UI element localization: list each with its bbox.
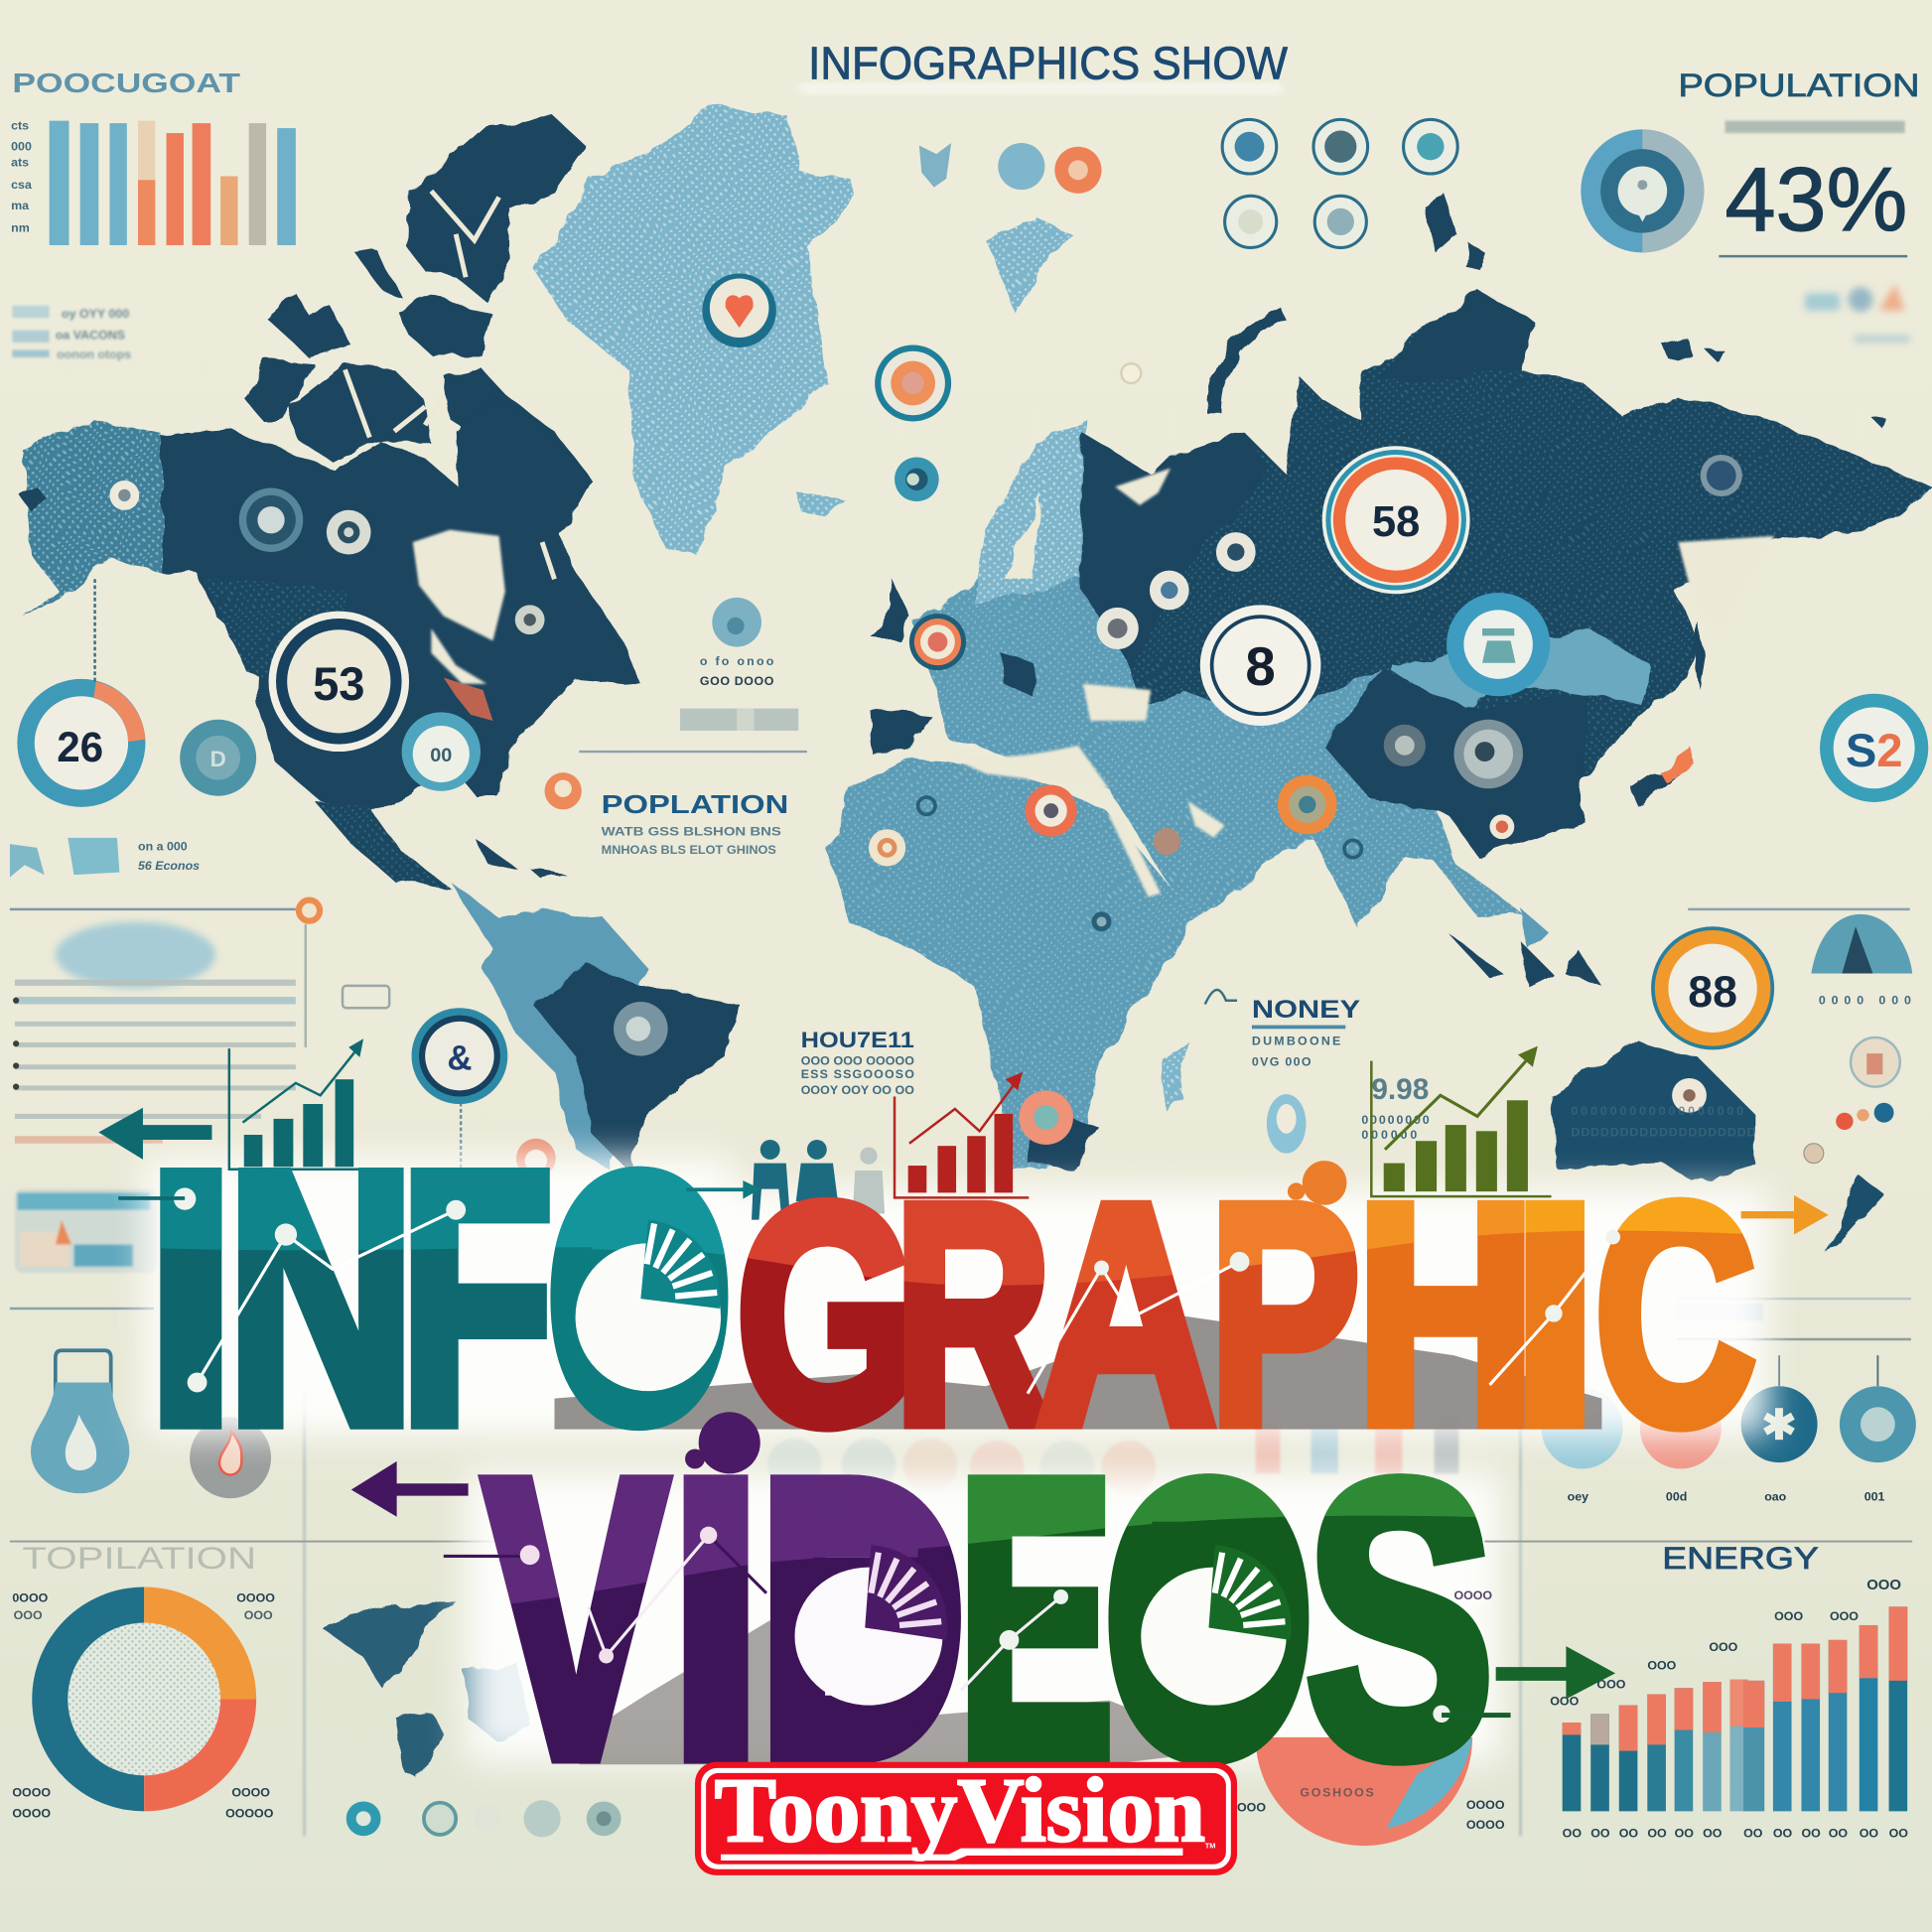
legend rows: left: oa VACONS bbox=[56, 328, 125, 342]
panel: bottom left donut bbox=[10, 1541, 505, 1821]
bar chart: top left: ma bbox=[11, 199, 29, 212]
marker: indian ocean orange stat: 88 bbox=[1688, 968, 1737, 1017]
lighter upper tone: A bbox=[1036, 1140, 1216, 1489]
asia and europe bbox=[914, 573, 1520, 930]
panel: energy chart: OOO bbox=[1647, 1659, 1677, 1673]
base dark letters: C bbox=[1594, 1139, 1756, 1488]
population label: center left: MNHOAS BLS ELOT GHINOS bbox=[602, 843, 776, 857]
marker: alaska bbox=[109, 481, 139, 510]
panel: bottom left donut: TOPILATION bbox=[22, 1541, 256, 1576]
base dark letters bbox=[484, 1398, 1493, 1840]
marker: canada central bbox=[327, 510, 371, 554]
panel: right icons row: oey bbox=[1568, 1490, 1588, 1504]
icon: salmon circle bbox=[1640, 1387, 1722, 1468]
lighter upper tone: V bbox=[484, 1400, 668, 1839]
marker: mediterranean bbox=[1026, 785, 1077, 837]
small world map bbox=[321, 1601, 530, 1780]
panel: energy chart: OO bbox=[1703, 1826, 1723, 1840]
panel: energy chart: OO bbox=[1801, 1826, 1821, 1840]
lighter upper tone: S bbox=[1307, 1403, 1493, 1837]
north america bbox=[162, 394, 640, 813]
population label: center left: GOO DOOO bbox=[700, 674, 774, 688]
arctic islands east bbox=[1422, 191, 1889, 431]
marker: atlantic south partly hidden bbox=[516, 1139, 556, 1177]
money label: NONEY bbox=[1252, 997, 1361, 1024]
icon: blue dial bbox=[998, 143, 1044, 190]
donut chart bbox=[32, 1587, 256, 1811]
panel: bottom left donut: 0OOO bbox=[12, 1590, 49, 1604]
logo: ToonyVision: ToonyVision bbox=[715, 1759, 1205, 1861]
panel: right upper labels: 0000 000 bbox=[1819, 993, 1911, 1007]
base dark letters: O bbox=[546, 1103, 733, 1495]
marker: atlantic bbox=[875, 345, 951, 421]
people icons bbox=[752, 1140, 885, 1220]
canada channels bbox=[345, 191, 554, 579]
money label: DUMBOONE bbox=[1252, 1034, 1340, 1047]
chart: olive growth: 000000 bbox=[1361, 1128, 1417, 1142]
chart: teal growth above I bbox=[229, 1038, 376, 1170]
marker: teal pacific: D bbox=[210, 747, 226, 771]
base dark letters: P bbox=[1209, 1140, 1360, 1489]
panel: right icons row bbox=[1542, 1299, 1916, 1504]
lighter upper tone: C bbox=[1594, 1139, 1756, 1488]
lighter upper tone bbox=[160, 1166, 1743, 1285]
lighter upper tone: I bbox=[1512, 1139, 1598, 1489]
world map bbox=[17, 104, 1932, 1256]
hout label bbox=[801, 1028, 914, 1097]
bar chart: top left: nm bbox=[11, 220, 30, 234]
base dark letters: F bbox=[400, 1098, 553, 1497]
marker: large usa stat bbox=[269, 612, 409, 752]
base dark letters: I bbox=[669, 1398, 763, 1839]
panel: faded striped panel left bbox=[10, 897, 389, 1144]
base dark letters: V bbox=[484, 1400, 668, 1839]
icon: orange dial bbox=[1054, 147, 1102, 194]
dots on I bbox=[685, 1412, 760, 1473]
arrow: purple left bbox=[351, 1461, 469, 1517]
japan bbox=[1632, 622, 1707, 807]
alaska bbox=[22, 419, 162, 619]
marker: teal pacific bbox=[180, 720, 256, 796]
panel: energy chart: OOO bbox=[1709, 1640, 1738, 1654]
legend rows: left: oy OYY 000 bbox=[62, 307, 129, 321]
lighter upper tone: O bbox=[1103, 1404, 1314, 1837]
white haze behind headline bbox=[145, 1159, 1768, 1762]
panel: energy chart: OO bbox=[1619, 1826, 1638, 1840]
small text: far left lower bbox=[10, 838, 200, 878]
panel: right icons row: 00d bbox=[1666, 1490, 1687, 1504]
icons: top center bbox=[919, 119, 1457, 383]
lighter upper tone: N bbox=[226, 1098, 415, 1497]
marker: atlantic pale bbox=[712, 598, 761, 647]
panel: bottom left donut: OOO bbox=[14, 1608, 43, 1622]
population label: center left: o fo onoo bbox=[700, 654, 774, 668]
panel: faded widget left bbox=[15, 1189, 157, 1273]
icon: flame bbox=[190, 1417, 271, 1498]
panel: bottom left donut: OOO bbox=[244, 1608, 273, 1622]
lighter upper tone: P bbox=[1209, 1140, 1360, 1489]
panel: population 43% bbox=[1581, 68, 1920, 343]
panel: bottom left donut: OOOO bbox=[231, 1785, 270, 1799]
title: INFOGRAPHICS SHOW bbox=[808, 37, 1289, 88]
faded section behind title bbox=[305, 1368, 1520, 1836]
canada arctic islands bbox=[246, 117, 592, 530]
panel: right icons row: ✱ bbox=[1761, 1402, 1797, 1449]
bar chart: top left: ats bbox=[11, 156, 29, 170]
marker: russia small bbox=[1097, 532, 1256, 649]
panel: energy chart: OO bbox=[1743, 1826, 1763, 1840]
inland seas bbox=[413, 469, 1774, 897]
population label: center left bbox=[579, 654, 807, 857]
donut behind videos: OOO bbox=[1237, 1800, 1266, 1814]
bar chart: top left bbox=[11, 68, 296, 245]
pie in D bbox=[794, 1522, 947, 1716]
chart: red growth bbox=[895, 1072, 1029, 1197]
marker: stat 8 bbox=[1200, 605, 1320, 726]
panel: energy chart: OO bbox=[1675, 1826, 1694, 1840]
panel: bottom left donut: OOOO bbox=[236, 1590, 275, 1604]
marker: south china bbox=[1489, 814, 1514, 839]
marker: russia east bbox=[1701, 455, 1742, 496]
greenland bbox=[536, 104, 857, 554]
hout label: ESS SSGOOOSO bbox=[801, 1067, 914, 1081]
lighter upper tone: H bbox=[1356, 1140, 1536, 1489]
marker: great lakes flag bbox=[444, 678, 492, 721]
panel: energy chart: OO bbox=[1647, 1826, 1667, 1840]
grey swoosh behind letters bbox=[554, 1315, 1601, 1764]
iceland bbox=[797, 492, 844, 517]
icon: small pin bbox=[919, 143, 951, 188]
marker: large russia stat bbox=[1322, 446, 1470, 594]
marker: orange bbox=[545, 772, 582, 809]
small text: far left lower: on a 000 bbox=[138, 839, 188, 853]
base dark letters: R bbox=[895, 1141, 1051, 1489]
map markers: eurasia: DDDDDDDDDDDDDDDDDDD bbox=[1571, 1125, 1756, 1139]
lighter upper tone: E bbox=[957, 1399, 1114, 1840]
marker: indian ocean orange stat bbox=[1651, 926, 1774, 1049]
panel: energy chart: OOO bbox=[1830, 1609, 1859, 1623]
marker: quebec bbox=[515, 605, 545, 634]
lighter upper tone: O bbox=[546, 1103, 733, 1495]
small icons row: bottom bbox=[346, 1800, 621, 1837]
headline: INFOGRAPHIC bbox=[118, 1097, 1756, 1497]
australia bbox=[1552, 1039, 1754, 1181]
legend rows: left: oonon otops bbox=[57, 347, 131, 361]
marker: large russia stat: 58 bbox=[1372, 498, 1420, 546]
panel: energy chart: OOO bbox=[1774, 1609, 1803, 1623]
arrow: orange right bbox=[1741, 1195, 1829, 1235]
donut behind videos: OOOO bbox=[1453, 1588, 1492, 1602]
novaya zemlya bbox=[1213, 314, 1284, 413]
donut behind videos: OOOO bbox=[1466, 1798, 1505, 1812]
panel: energy chart: OOO bbox=[1596, 1677, 1626, 1691]
panel: population 43%: POPULATION bbox=[1678, 68, 1920, 103]
marker: south africa bbox=[1019, 1090, 1073, 1145]
central and south america bbox=[450, 881, 647, 1171]
icons: faded bbox=[1805, 283, 1910, 343]
arrow: green right bbox=[1496, 1646, 1615, 1699]
panel: energy chart: OOO bbox=[1550, 1695, 1580, 1709]
panel: bottom left donut: OOOO bbox=[12, 1807, 51, 1821]
marker: brazil bbox=[614, 1002, 668, 1056]
base dark letters: A bbox=[1036, 1140, 1216, 1489]
base dark letters bbox=[146, 1097, 1756, 1497]
panel: bottom left donut: OOOO bbox=[12, 1785, 51, 1799]
arrow: teal left bbox=[98, 1108, 211, 1160]
base dark letters: H bbox=[1356, 1140, 1536, 1489]
icon: teal circle bbox=[1840, 1386, 1916, 1462]
russia bbox=[1083, 290, 1932, 857]
hout label: HOU7E11 bbox=[801, 1028, 914, 1052]
donut: population bbox=[1581, 129, 1704, 252]
marker: stat 8: 8 bbox=[1245, 636, 1276, 697]
panel: right icons row: 001 bbox=[1864, 1490, 1885, 1504]
base dark letters: S bbox=[1307, 1403, 1493, 1837]
icon: bottle bbox=[31, 1350, 129, 1493]
panel: energy chart: OO bbox=[1889, 1826, 1908, 1840]
panel: energy chart: OO bbox=[1829, 1826, 1848, 1840]
donut behind videos bbox=[1237, 1588, 1505, 1846]
chart: olive growth: 9.98 bbox=[1371, 1073, 1429, 1106]
bar chart: top left: POOCUGOAT bbox=[12, 68, 240, 98]
marker: large usa stat: 53 bbox=[313, 657, 365, 710]
base dark letters: E bbox=[957, 1399, 1114, 1840]
panel: energy chart: ENERGY bbox=[1662, 1541, 1819, 1576]
lighter upper tone: F bbox=[400, 1098, 553, 1497]
money label bbox=[1205, 990, 1361, 1069]
uk and iberia bbox=[873, 577, 909, 640]
chart: olive growth: 00000000 bbox=[1361, 1113, 1430, 1127]
chart: olive growth bbox=[1361, 1046, 1552, 1196]
marker: australia bbox=[1672, 1078, 1707, 1113]
pie in O bbox=[1141, 1522, 1292, 1716]
svalbard patch bbox=[986, 215, 1072, 314]
marker: small atlantic bbox=[895, 457, 939, 501]
lighter upper tone: R bbox=[895, 1141, 1051, 1489]
marker: canada west bbox=[239, 487, 303, 552]
bar chart: top left: csa bbox=[11, 178, 32, 192]
donut behind videos: OOOO bbox=[1466, 1818, 1505, 1832]
lighter upper tone: D bbox=[758, 1398, 967, 1839]
base dark letters: I bbox=[1512, 1139, 1598, 1489]
lighter upper tone: I bbox=[146, 1097, 236, 1497]
marker: greenland bbox=[702, 274, 776, 347]
legend rows: left bbox=[12, 306, 131, 361]
panel: energy chart: OO bbox=[1773, 1826, 1793, 1840]
marker: arabia bbox=[1278, 775, 1337, 834]
marker: pacific stat: S2 bbox=[1846, 724, 1903, 776]
marker: south america stat bbox=[412, 1008, 507, 1171]
connector lines bbox=[588, 1535, 1061, 1691]
africa bbox=[828, 758, 1201, 1171]
panel: right upper labels bbox=[1688, 909, 1912, 1164]
small text: far left lower: 56 Econos bbox=[138, 859, 200, 873]
lighter upper tone bbox=[478, 1473, 1475, 1604]
population label: center left: POPLATION bbox=[602, 789, 788, 819]
donut: 26: 26 bbox=[57, 724, 103, 770]
base dark letters: I bbox=[146, 1097, 236, 1497]
headline: VIDEOS bbox=[443, 1412, 1511, 1766]
arrow: teal right bbox=[686, 1180, 760, 1199]
panel: energy chart: OOO bbox=[1866, 1578, 1901, 1593]
map markers: eurasia bbox=[869, 446, 1928, 1154]
map markers: americas bbox=[17, 274, 951, 1177]
logo: ToonyVision: TM bbox=[1205, 1842, 1216, 1851]
indonesia bbox=[1451, 936, 1601, 986]
panel: energy chart: OO bbox=[1590, 1826, 1610, 1840]
money label: 0VG 00O bbox=[1252, 1055, 1311, 1069]
panel: population 43%: 43% bbox=[1725, 150, 1907, 250]
marker: pacific stat bbox=[1820, 694, 1928, 802]
marker: kazakhstan teal bbox=[1447, 593, 1550, 696]
lighter upper tone: G bbox=[736, 1140, 916, 1488]
panel: energy chart: OO bbox=[1860, 1826, 1878, 1840]
hout label: OOOY OOY OO OO bbox=[801, 1083, 914, 1097]
map markers: eurasia: 000000000000000000 bbox=[1571, 1104, 1743, 1118]
icon: dark teal circle bbox=[1741, 1386, 1818, 1462]
donut behind videos: GOSHOOS bbox=[1300, 1785, 1374, 1799]
panel: bottom left donut: OOOOO bbox=[225, 1807, 274, 1821]
marker: east usa: 00 bbox=[430, 745, 452, 766]
panel: right icons row: oao bbox=[1764, 1490, 1787, 1504]
icon: outlined circles bbox=[1222, 119, 1457, 247]
panel: energy chart bbox=[1484, 1541, 1912, 1840]
marker: indian ocean pale bbox=[1267, 1094, 1307, 1154]
bar chart: top left: cts bbox=[11, 118, 29, 132]
base dark letters: D bbox=[758, 1398, 967, 1839]
connector lines bbox=[198, 1210, 1613, 1394]
marker: uk bbox=[909, 614, 966, 670]
dots on P bbox=[1288, 1161, 1346, 1205]
base dark letters: N bbox=[226, 1098, 415, 1497]
base dark letters: G bbox=[736, 1140, 916, 1488]
marker: south america stat: & bbox=[447, 1039, 472, 1077]
marker: east usa bbox=[402, 712, 481, 791]
base dark letters: O bbox=[1103, 1404, 1314, 1837]
marker: china bbox=[1453, 720, 1523, 788]
hout label: OOO OOO OOOOO bbox=[801, 1053, 914, 1067]
icon: faint dot bbox=[1121, 363, 1141, 383]
donut: 26 bbox=[17, 579, 145, 807]
population label: center left: WATB GSS BLSHON BNS bbox=[602, 824, 781, 838]
lighter upper tone: I bbox=[669, 1398, 763, 1839]
bar chart: top left: 000 bbox=[11, 139, 32, 153]
panel: energy chart: OO bbox=[1563, 1826, 1582, 1840]
pie in O bbox=[576, 1201, 721, 1391]
icon: pale blue circle bbox=[1542, 1387, 1622, 1468]
